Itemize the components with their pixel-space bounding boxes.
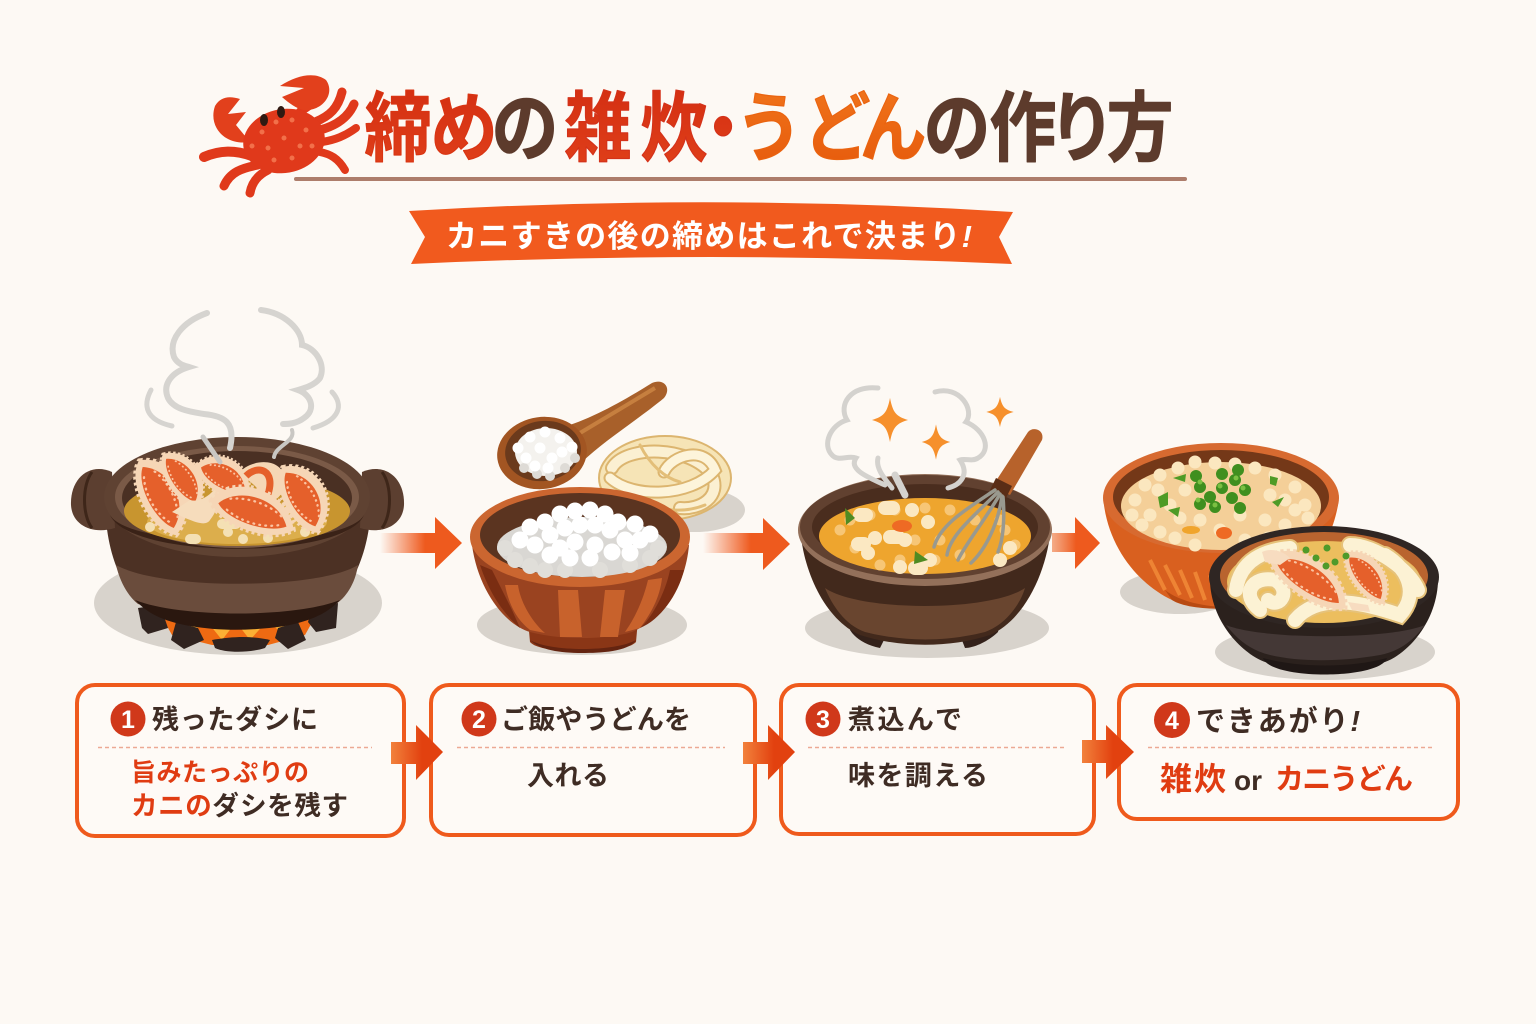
step 3 number: 3 [816,706,830,734]
step 2 number: 2 [472,706,486,734]
title: うどん [736,87,926,172]
step 4 number [1154,702,1190,738]
ribbon banner [409,202,1013,264]
arrow 1 [380,517,462,569]
step card 2 [431,685,755,835]
arrow 3 [1052,517,1100,569]
step 1 number: 1 [121,706,135,734]
step 4 result: zosui: 雑炊 [1160,761,1226,797]
step 4 illustration: finished zosui [1103,443,1339,614]
step 2 number [462,702,496,736]
step 3 illustration: simmering pot with whisk and sparkle [798,388,1052,658]
ribbon text: カニすきの後の締めはこれで決まり! [446,219,972,254]
step 4 result: or: or [1234,765,1262,796]
arrow 2 [703,518,790,570]
step 3 number [806,702,840,736]
title: 雑炊・ [565,87,756,172]
step 4 illustration: crab udon [1209,526,1439,680]
step card 3 [781,685,1094,834]
step 4 number: 4 [1165,707,1179,735]
step 1 description: 旨みたっぷりの [131,759,309,787]
step card 1 [77,685,404,836]
title: の [492,87,558,172]
title [365,87,1173,172]
step 1 heading: 残ったダシに [152,704,318,735]
step 4 heading: できあがり! [1196,704,1360,738]
step 4 result: crab udon: カニうどん [1275,763,1413,796]
title: の作り方 [924,87,1173,172]
step 1 illustration: clay pot over fire with steam [71,310,404,655]
title: 締め [365,87,497,172]
step 1 description line 2: カニのダシを残す [131,791,348,821]
step 3 description: 味を調える [848,761,988,791]
step card 4 [1119,685,1458,819]
wooden spoon [492,382,667,495]
noodle bundle [599,436,731,520]
icon: crab [204,75,356,193]
card arrow 1 [391,725,443,780]
step 1 number [110,702,146,736]
title underline [294,177,1187,181]
step 2 illustration: rice bowl, spoon and udon [470,382,745,655]
step 2 description: 入れる [527,761,609,791]
card arrow 2 [743,725,795,780]
card arrow 3 [1082,725,1134,779]
step 2 heading: ご飯やうどんを [501,704,691,735]
step 3 heading: 煮込んで [848,705,962,735]
